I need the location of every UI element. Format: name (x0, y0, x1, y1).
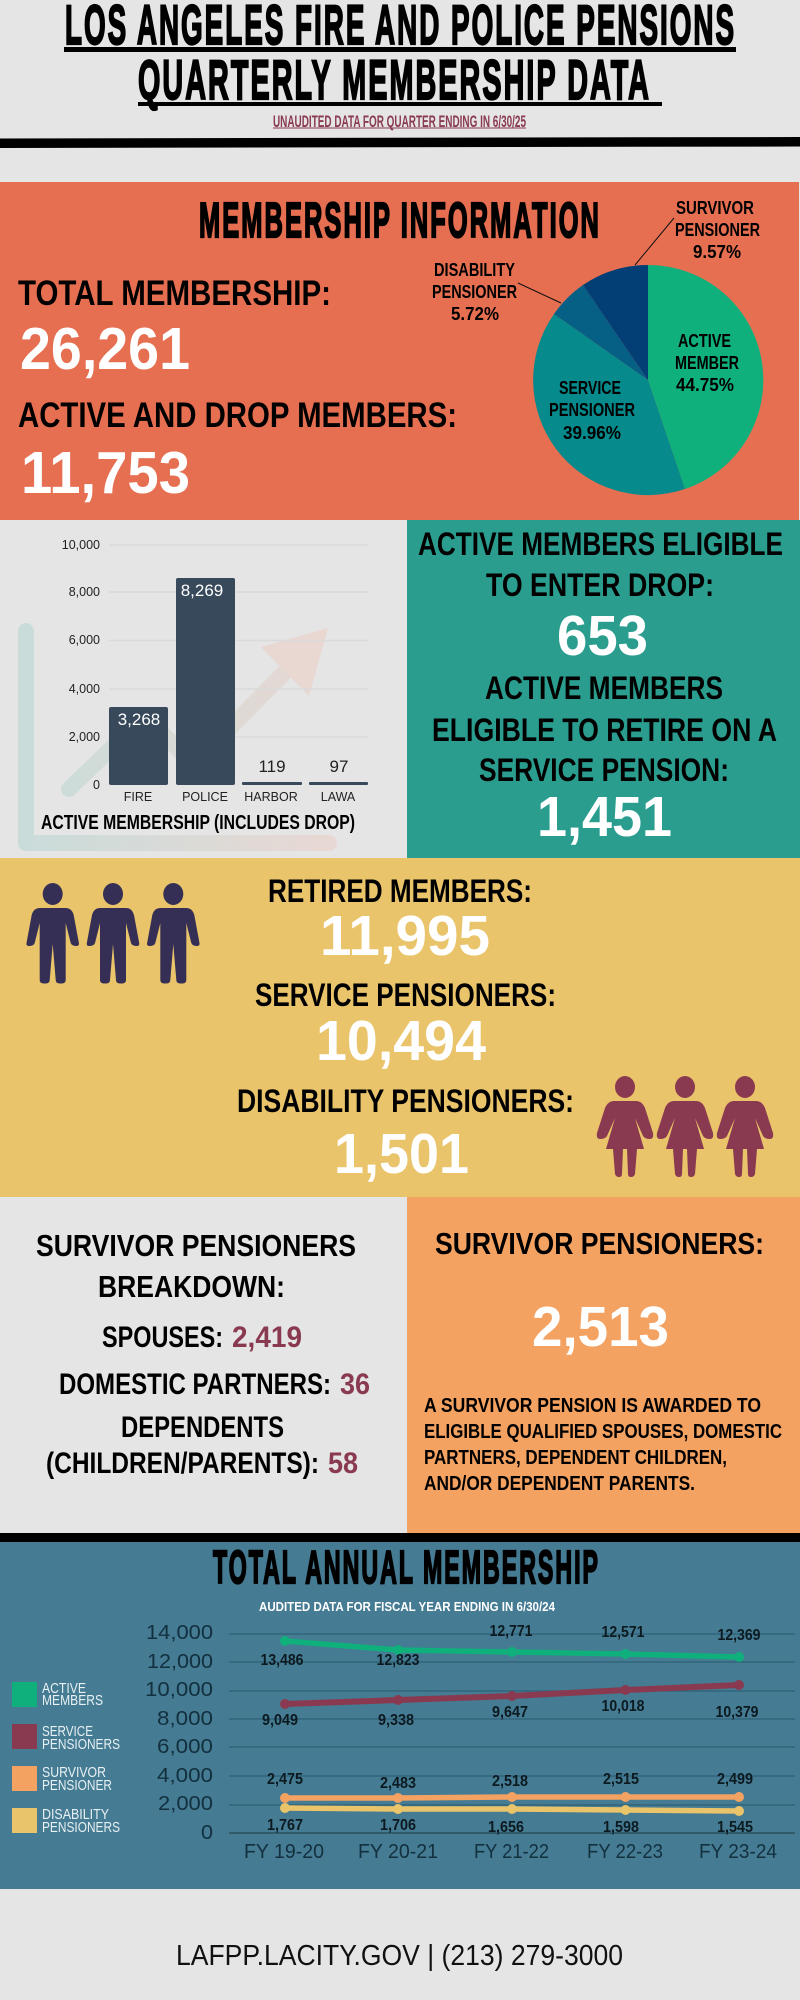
series: disability pensioners: 1,545 (717, 1819, 753, 1836)
series: disability pensioners (267, 1803, 753, 1836)
pie label: survivor pensioner: 9.57% (693, 242, 741, 262)
series: service pensioners: 10,379 (716, 1704, 759, 1721)
number: service pensioners: 10,494 (316, 1009, 486, 1073)
bar: fire: 3,268 (118, 710, 160, 729)
series: service pensioners (262, 1680, 759, 1729)
number: active and drop members: 11,753 (21, 440, 190, 506)
legend: survivor pensioner (12, 1764, 112, 1794)
panel: eligibility (407, 520, 800, 858)
series: survivor pensioner: 2,518 (492, 1773, 528, 1790)
y axis labels: 10,000 (62, 538, 100, 552)
row: domestic partners: 36 (340, 1368, 370, 1401)
series: disability pensioners: 1,767 (267, 1817, 303, 1834)
series: service pensioners: 9,338 (378, 1712, 414, 1729)
line chart (145, 1622, 795, 1863)
pie label: disability pensioner: 5.72% (451, 304, 499, 324)
legend: survivor pensioner: PENSIONER (42, 1777, 112, 1794)
icon: three men (26, 883, 200, 984)
heading: survivor pensioners breakdown (36, 1228, 356, 1304)
legend: active members: ACTIVE (42, 1680, 86, 1697)
legend: service pensioners: PENSIONERS (42, 1736, 120, 1753)
label: eligible to enter drop (418, 526, 783, 603)
y axis labels: 8,000 (157, 1708, 213, 1730)
series: survivor pensioner: 2,483 (380, 1775, 416, 1792)
y axis labels: 2,000 (69, 730, 100, 744)
series: active members (260, 1623, 761, 1669)
legend: service pensioners (12, 1723, 120, 1753)
series: survivor pensioner: 2,499 (717, 1771, 753, 1788)
description text: PARTNERS, DEPENDENT CHILDREN, (424, 1447, 727, 1469)
series: active members: 13,486 (260, 1652, 304, 1669)
legend: disability pensioners: DISABILITY (42, 1806, 109, 1823)
panel: survivor pensioners (407, 1197, 800, 1533)
bar: police: POLICE (182, 790, 228, 804)
row: dependents: DEPENDENTS (121, 1411, 284, 1444)
x axis labels: FY 21-22 (474, 1841, 549, 1863)
row: spouses: 2,419 (232, 1321, 302, 1354)
number: eligible to enter drop: 653 (557, 604, 648, 668)
label: active and drop members: ACTIVE AND DROP MEMBERS: (18, 396, 457, 435)
series: service pensioners: 10,018 (602, 1698, 645, 1715)
pie label: survivor pensioner: SURVIVOR (676, 198, 754, 218)
chart title: ACTIVE MEMBERSHIP (INCLUDES DROP) (41, 812, 355, 834)
bar: harbor: HARBOR (244, 790, 298, 804)
y axis labels: 8,000 (69, 585, 100, 599)
description text (424, 1395, 782, 1495)
y axis labels: 12,000 (147, 1651, 213, 1673)
panel: total annual membership (0, 1541, 800, 1889)
bar: lawa: LAWA (321, 790, 356, 804)
subtitle: UNAUDITED DATA FOR QUARTER ENDING IN 6/30/25 (273, 112, 526, 131)
header (0, 0, 800, 148)
legend: disability pensioners (12, 1806, 120, 1836)
series: disability pensioners: 1,706 (380, 1817, 416, 1834)
y axis labels: 4,000 (157, 1765, 213, 1787)
bar: police: 8,269 (181, 581, 223, 600)
legend: service pensioners: SERVICE (42, 1723, 93, 1740)
y axis labels: 6,000 (69, 633, 100, 647)
number: total membership: 26,261 (20, 316, 190, 382)
series: survivor pensioner: 2,515 (603, 1771, 639, 1788)
y axis labels: 0 (93, 778, 100, 792)
panel: retired members (0, 858, 800, 1197)
pie chart (432, 198, 763, 495)
legend: disability pensioners: PENSIONERS (42, 1819, 120, 1836)
bar: fire: FIRE (124, 790, 152, 804)
row: dependents (46, 1411, 358, 1480)
number: survivor pensioners: 2,513 (532, 1295, 669, 1359)
bar: harbor (242, 757, 302, 804)
label: eligible to retire (432, 670, 777, 788)
series: active members: 12,571 (602, 1624, 645, 1641)
pie label: survivor pensioner (675, 198, 760, 262)
pie label: service pensioner: PENSIONER (549, 400, 635, 420)
bar: harbor: 119 (258, 757, 286, 776)
x axis labels: FY 23-24 (699, 1841, 777, 1863)
pie label: active member: ACTIVE (678, 331, 731, 351)
label: eligible to retire: ACTIVE MEMBERS (485, 670, 723, 706)
pie label: disability pensioner (432, 260, 517, 324)
icon: faded growth arrow background (26, 628, 329, 843)
x axis labels: FY 20-21 (358, 1841, 438, 1863)
y axis labels: 14,000 (146, 1622, 213, 1644)
label: disability pensioners: DISABILITY PENSIONERS: (237, 1083, 574, 1119)
pie label: survivor pensioner: PENSIONER (675, 220, 760, 240)
description text: AND/OR DEPENDENT PARENTS. (424, 1473, 695, 1495)
panel: membership information (0, 182, 799, 520)
legend: active members: MEMBERS (42, 1692, 103, 1709)
legend: survivor pensioner: SURVIVOR (42, 1764, 106, 1781)
row: spouses: SPOUSES: (102, 1321, 223, 1354)
number: disability pensioners: 1,501 (334, 1122, 469, 1186)
y axis labels: 6,000 (157, 1736, 213, 1758)
pie label: service pensioner (549, 378, 635, 443)
pie label: service pensioner: SERVICE (559, 378, 621, 398)
pie label: disability pensioner: PENSIONER (432, 282, 517, 302)
pie label: active member: MEMBER (675, 353, 739, 373)
label: total membership: TOTAL MEMBERSHIP: (18, 274, 331, 313)
bar: fire (109, 707, 168, 804)
series: disability pensioners: 1,656 (488, 1819, 524, 1836)
pie label: disability pensioner: DISABILITY (434, 260, 515, 280)
label: eligible to enter drop: TO ENTER DROP: (486, 567, 714, 603)
legend (12, 1680, 120, 1836)
pie label: active member: 44.75% (676, 375, 734, 395)
pie label: service pensioner: 39.96% (563, 423, 621, 443)
bar chart (62, 538, 368, 804)
icon: three women (597, 1076, 773, 1177)
series: active members: 12,823 (376, 1652, 420, 1669)
series: survivor pensioner (267, 1771, 753, 1803)
x axis labels: FY 22-23 (587, 1841, 663, 1863)
panel: survivor pensioners breakdown (0, 1197, 407, 1533)
series: service pensioners: 9,647 (492, 1704, 528, 1721)
y axis labels: 2,000 (158, 1793, 213, 1815)
number: eligible to retire: 1,451 (537, 785, 672, 849)
series: active members: 12,771 (490, 1623, 533, 1640)
label: retired members: RETIRED MEMBERS: (268, 873, 532, 909)
y axis labels: 0 (201, 1822, 213, 1844)
y axis labels (62, 538, 100, 792)
row: dependents: (CHILDREN/PARENTS): (46, 1447, 319, 1480)
x axis labels (244, 1841, 777, 1863)
series: service pensioners: 9,049 (262, 1712, 298, 1729)
bar: lawa (309, 757, 368, 804)
series: survivor pensioner: 2,475 (267, 1771, 303, 1788)
panel: active membership bar chart (0, 520, 407, 858)
bar: lawa: 97 (330, 757, 348, 776)
y axis labels: 4,000 (69, 682, 100, 696)
subtitle: audited data: AUDITED DATA FOR FISCAL YEAR ENDING IN 6/30/24 (259, 1599, 556, 1614)
description text: A SURVIVOR PENSION IS AWARDED TO (424, 1395, 761, 1417)
y axis labels (145, 1622, 213, 1844)
label: service pensioners: SERVICE PENSIONERS: (255, 977, 556, 1013)
bar: police (176, 578, 235, 804)
row: dependents: 58 (328, 1447, 358, 1480)
series: active members: 12,369 (718, 1627, 761, 1644)
label: eligible to retire: SERVICE PENSION: (479, 752, 729, 788)
pie label: active member (675, 331, 739, 395)
heading: survivor pensioners breakdown: BREAKDOWN: (98, 1269, 285, 1304)
legend: active members (12, 1680, 103, 1709)
footer: website and phone: LAFPP.LACITY.GOV | (213) 279-3000 (176, 1940, 623, 1972)
series: disability pensioners: 1,598 (603, 1819, 639, 1836)
heading: survivor pensioners breakdown: SURVIVOR PENSIONERS (36, 1228, 356, 1263)
y axis labels: 10,000 (145, 1679, 213, 1701)
number: retired members: 11,995 (320, 904, 490, 968)
row: domestic partners: DOMESTIC PARTNERS: (59, 1368, 331, 1401)
x axis labels: FY 19-20 (244, 1841, 324, 1863)
